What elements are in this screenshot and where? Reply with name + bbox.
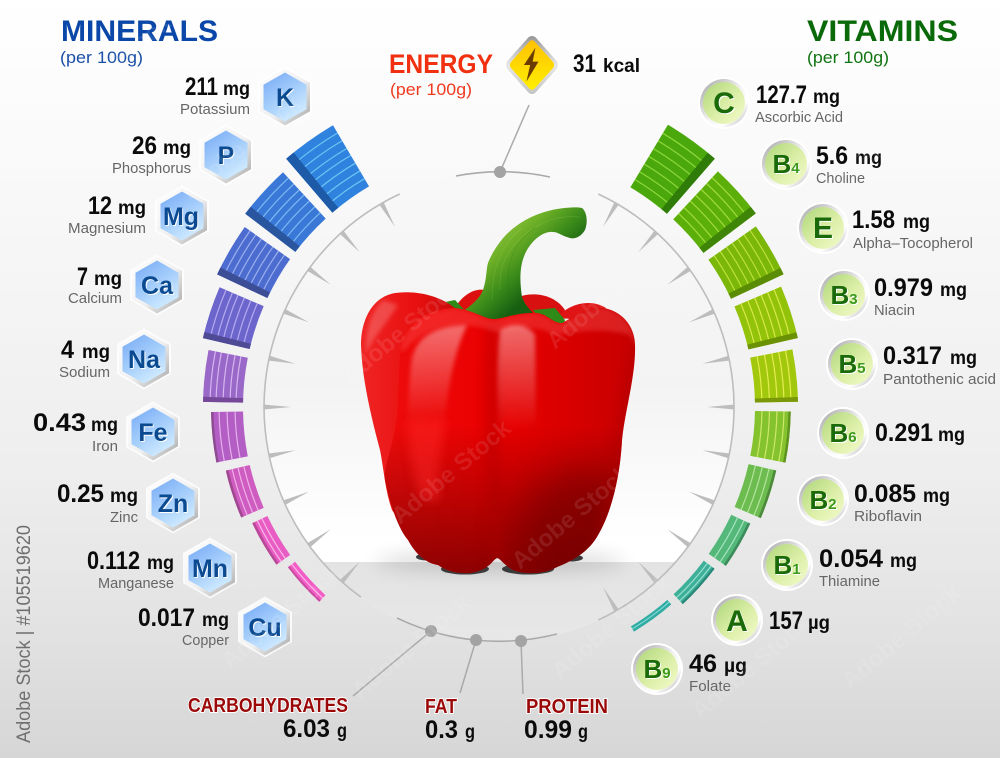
vitamin: B5: B5 — [838, 349, 866, 379]
vitamin: A — [711, 594, 830, 646]
watermark: Adobe Stock — [687, 609, 817, 725]
vitamin: B6: B6 — [829, 418, 857, 448]
vitamin: B3: Niacin — [874, 302, 915, 319]
bar: vitamin B1 — [133, 41, 865, 758]
watermark: Adobe Stock — [507, 459, 637, 575]
vitamin: E — [797, 202, 973, 254]
mineral: potassium: mg — [223, 79, 250, 100]
heading: vitamins: VITAMINS — [807, 15, 958, 48]
mineral: phosphorus: P — [218, 142, 234, 170]
heading: vitamins — [807, 15, 958, 67]
vitamin: B9: 46 — [689, 650, 717, 678]
mineral: copper — [138, 596, 292, 658]
panel: vitamins list — [631, 77, 996, 695]
icon: energy bolt diamond — [502, 31, 562, 99]
vitamin: B1: Thiamine — [819, 573, 880, 590]
mineral: copper: Cu — [248, 614, 282, 642]
value: energy: 31 — [573, 50, 596, 78]
value: energy — [573, 50, 640, 78]
pepper back lobes — [361, 290, 606, 557]
mineral: zinc — [57, 472, 200, 534]
mineral: manganese — [87, 538, 237, 598]
vitamin: C — [698, 77, 843, 129]
vitamin: B2: 0.085 — [854, 480, 916, 508]
vitamin: B6: mg — [938, 425, 965, 446]
bar: vitamin B9 — [134, 42, 864, 758]
pepper body — [384, 308, 636, 574]
panel: minerals list — [33, 66, 312, 658]
vitamin: C: mg — [813, 87, 840, 108]
bar: vitamin B5 — [157, 65, 841, 749]
vitamin: B1: mg — [890, 551, 917, 572]
bar: sodium — [205, 113, 793, 701]
central disc — [268, 438, 730, 634]
vitamin: B2: mg — [923, 486, 950, 507]
mineral: magnesium: Mg — [163, 203, 199, 231]
macro: fat: 0.3 — [425, 716, 458, 744]
watermark: Adobe Stock — [837, 579, 967, 695]
heading: minerals: (per 100g) — [60, 48, 143, 67]
mineral: copper: Copper — [182, 632, 229, 649]
mineral: potassium: Potassium — [180, 101, 250, 118]
vitamin: B1 — [761, 539, 917, 591]
vitamin: B1: 0.054 — [819, 545, 883, 573]
vitamin: B1: B1 — [773, 550, 801, 580]
bar: vitamin B6 — [203, 111, 795, 703]
vitamin: B2: B2 — [809, 485, 837, 515]
vitamin: B9: B9 — [643, 654, 671, 684]
macro: protein — [524, 696, 608, 744]
centre lobe highlight — [498, 325, 536, 430]
mineral: potassium: 211 — [185, 73, 218, 101]
mineral: iron — [33, 402, 180, 462]
lobe seam — [482, 322, 502, 488]
vitamin: C: 127.7 — [756, 81, 807, 109]
pepper ground shadow — [375, 553, 625, 571]
bar: zinc — [133, 41, 865, 758]
watermark: Adobe Stock — [542, 239, 672, 355]
vitamin: C: C — [713, 87, 735, 120]
mineral: calcium — [68, 254, 184, 316]
mineral: calcium: Ca — [141, 272, 174, 300]
heading: minerals — [60, 15, 218, 67]
vitamin: B4: B4 — [772, 149, 800, 179]
mineral: potassium — [180, 66, 312, 128]
vitamin: E: Alpha–Tocopherol — [853, 235, 973, 252]
mineral: potassium: K — [276, 84, 294, 112]
vitamin: B4: mg — [855, 148, 882, 169]
heading: energy: ENERGY — [389, 49, 493, 79]
heading: energy: (per 100g) — [390, 80, 472, 99]
mineral: iron: Iron — [92, 438, 118, 455]
mineral: magnesium: mg — [118, 198, 146, 219]
mineral: calcium: mg — [94, 269, 122, 290]
mineral: zinc: mg — [110, 486, 138, 507]
bar: vitamin A — [123, 31, 875, 758]
vitamin: B5: mg — [950, 348, 977, 369]
vitamin: B3: mg — [940, 280, 967, 301]
macro: fat: FAT — [425, 696, 457, 718]
macro: carbohydrates: CARBOHYDRATES — [188, 695, 348, 717]
mineral: manganese: mg — [147, 553, 174, 574]
vitamin: B4 — [760, 138, 882, 190]
vitamin: E: mg — [903, 212, 930, 233]
mineral: copper: 0.017 — [138, 604, 195, 632]
stock id stamp: Adobe Stock | #105519620 — [14, 525, 35, 743]
watermark: Adobe Stock — [372, 74, 502, 190]
vitamin: B6 — [817, 407, 965, 459]
mineral: calcium: 7 — [77, 263, 88, 291]
mineral: sodium: 4 — [61, 336, 74, 364]
mineral: sodium: mg — [82, 342, 110, 363]
bar: vitamin B3 — [107, 15, 891, 758]
macronutrient connectors — [353, 618, 557, 696]
bar: manganese — [121, 29, 877, 758]
vitamin: E: E — [813, 212, 833, 245]
mineral: sodium: Na — [128, 346, 161, 374]
gauge: left arc with ticks — [264, 194, 400, 597]
vitamin: B5 — [826, 338, 996, 390]
mineral: iron: 0.43 — [33, 409, 86, 437]
mineral: magnesium — [68, 186, 209, 246]
mineral: sodium — [59, 328, 171, 390]
pepper base — [416, 554, 583, 574]
watermark: Adobe Stock — [347, 589, 477, 705]
watermark: Adobe Stock — [542, 59, 672, 175]
macro: carbohydrates: 6.03 — [283, 715, 330, 743]
macro: protein: PROTEIN — [526, 696, 608, 718]
mineral: zinc: Zn — [158, 490, 188, 518]
heading: minerals: MINERALS — [61, 15, 218, 48]
vitamin: B3: 0.979 — [874, 274, 933, 302]
bar: calcium — [142, 50, 856, 758]
macro: carbohydrates: g — [337, 721, 347, 742]
gauge: right arc with ticks — [598, 194, 734, 620]
macro: fat — [425, 696, 475, 744]
heading: vitamins: (per 100g) — [807, 48, 889, 67]
pepper — [361, 207, 636, 578]
mineral: sodium: Sodium — [59, 364, 110, 381]
value: energy: kcal — [603, 56, 640, 77]
vitamin: B3: B3 — [830, 280, 858, 310]
watermark: Adobe Stock — [47, 9, 177, 125]
mineral: magnesium: 12 — [88, 192, 112, 220]
left lobe long sheen — [408, 420, 446, 500]
watermark: Adobe Stock — [177, 89, 307, 205]
macro: carbohydrates — [188, 695, 348, 743]
heading: energy — [389, 49, 493, 99]
watermark: Adobe Stock — [547, 569, 677, 685]
mineral: copper: mg — [202, 610, 229, 631]
vitamin: C: Ascorbic Acid — [755, 109, 843, 126]
vitamin: E: 1.58 — [852, 206, 895, 234]
mineral: phosphorus: mg — [163, 138, 191, 159]
vitamin: B4: 5.6 — [816, 142, 848, 170]
vitamin: A: 157 — [769, 607, 803, 635]
mineral: phosphorus: 26 — [132, 132, 157, 160]
vitamin: B2 — [797, 474, 950, 526]
vitamin: B3 — [818, 269, 967, 321]
mineral: manganese: 0.112 — [87, 547, 140, 575]
mineral: magnesium: Magnesium — [68, 220, 146, 237]
vitamin: A: A — [726, 605, 748, 638]
dark lower right shading — [505, 451, 619, 573]
vitamin: B5: Pantothenic acid — [883, 371, 996, 388]
macro: protein: g — [578, 722, 588, 743]
vitamin: B6: 0.291 — [875, 419, 933, 447]
bar: copper — [126, 34, 872, 758]
mineral: manganese: Manganese — [98, 575, 174, 592]
mineral: zinc: Zinc — [110, 509, 138, 526]
macro: protein: 0.99 — [524, 716, 572, 744]
mineral: manganese: Mn — [192, 555, 228, 583]
vitamin: B4: Choline — [816, 170, 865, 187]
vitamin: B5: 0.317 — [883, 342, 942, 370]
top lobe glow — [400, 308, 635, 352]
watermark: Adobe Stock — [337, 274, 467, 390]
watermark: Adobe Stock — [217, 559, 347, 675]
bar: iron — [163, 71, 835, 743]
macro: fat: g — [465, 722, 475, 743]
energy connector — [456, 105, 550, 178]
vitamin: B2: Riboflavin — [854, 508, 922, 525]
watermark: Adobe Stock — [387, 414, 517, 530]
pepper stem — [462, 207, 587, 322]
vitamin: B9 — [631, 643, 747, 695]
mineral: phosphorus: Phosphorus — [112, 160, 191, 177]
mineral: calcium: Calcium — [68, 290, 122, 307]
watermark: Adobe Stock — [817, 89, 947, 205]
mineral: phosphorus — [112, 124, 253, 186]
vitamin: A: µg — [808, 613, 830, 634]
right side shading — [596, 356, 635, 536]
bar: vitamin B2 — [159, 67, 839, 747]
vitamin: B9: Folate — [689, 678, 731, 695]
vitamin: B9: µg — [724, 656, 747, 677]
left lobe highlight — [408, 325, 467, 425]
mineral: zinc: 0.25 — [57, 480, 104, 508]
mineral: iron: mg — [91, 415, 118, 436]
mineral: iron: Fe — [138, 419, 168, 447]
